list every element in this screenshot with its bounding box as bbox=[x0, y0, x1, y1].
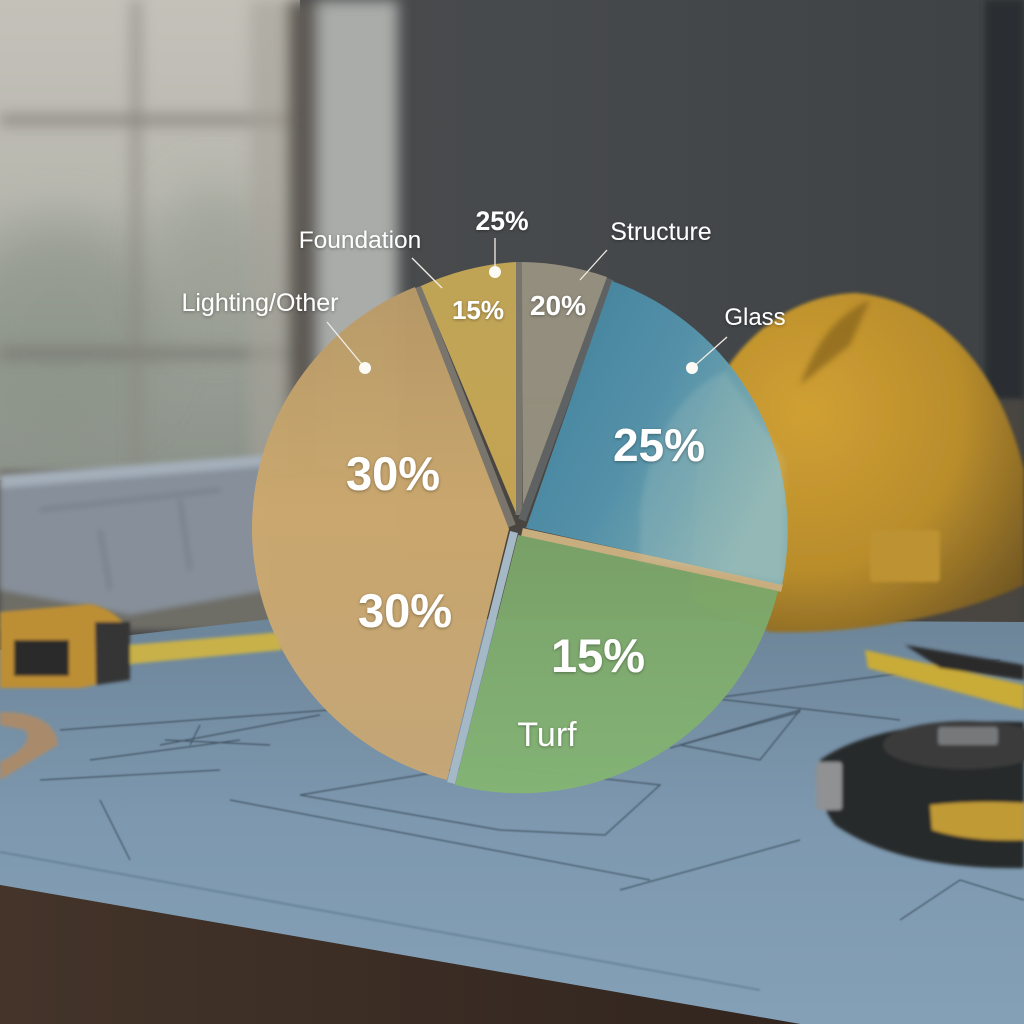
label: turf: Turf bbox=[517, 716, 577, 754]
pie chart bbox=[181, 206, 788, 793]
label: foundation: Foundation bbox=[299, 227, 421, 254]
label: lighting/other: Lighting/Other bbox=[181, 289, 339, 317]
slice: foundation yellow bbox=[421, 262, 516, 513]
background: hard hat bbox=[690, 293, 1024, 632]
label: 25% top bbox=[475, 206, 529, 278]
slice: structure grey bbox=[522, 262, 607, 505]
slice: lighting/other tan bbox=[252, 287, 509, 780]
background: blueprint table bbox=[0, 618, 1024, 1024]
background: tape measure right bbox=[816, 645, 1024, 868]
label: structure: Structure bbox=[610, 218, 712, 246]
value: foundation 15%: 15% bbox=[452, 295, 504, 325]
value: turf 15%: 15% bbox=[551, 629, 645, 682]
value: structure 20%: 20% bbox=[530, 290, 586, 321]
background: tape measure left bbox=[0, 604, 282, 780]
slice: turf green bbox=[455, 535, 778, 793]
value: glass 25%: 25% bbox=[613, 419, 705, 471]
slice gaps bbox=[418, 262, 782, 783]
background: rolled blueprint bbox=[0, 455, 270, 615]
label: lighting/other bbox=[181, 289, 371, 374]
label: glass: Glass bbox=[724, 304, 786, 331]
slice: glass blue bbox=[526, 281, 788, 585]
label: structure bbox=[580, 218, 712, 280]
hard hat showing through glass bbox=[640, 372, 785, 582]
value: tan 30% upper: 30% bbox=[346, 447, 440, 500]
label: 25% top: 25% bbox=[475, 206, 529, 236]
label: foundation bbox=[299, 227, 442, 288]
label: glass bbox=[686, 304, 786, 374]
value: tan 30% lower: 30% bbox=[358, 584, 452, 637]
